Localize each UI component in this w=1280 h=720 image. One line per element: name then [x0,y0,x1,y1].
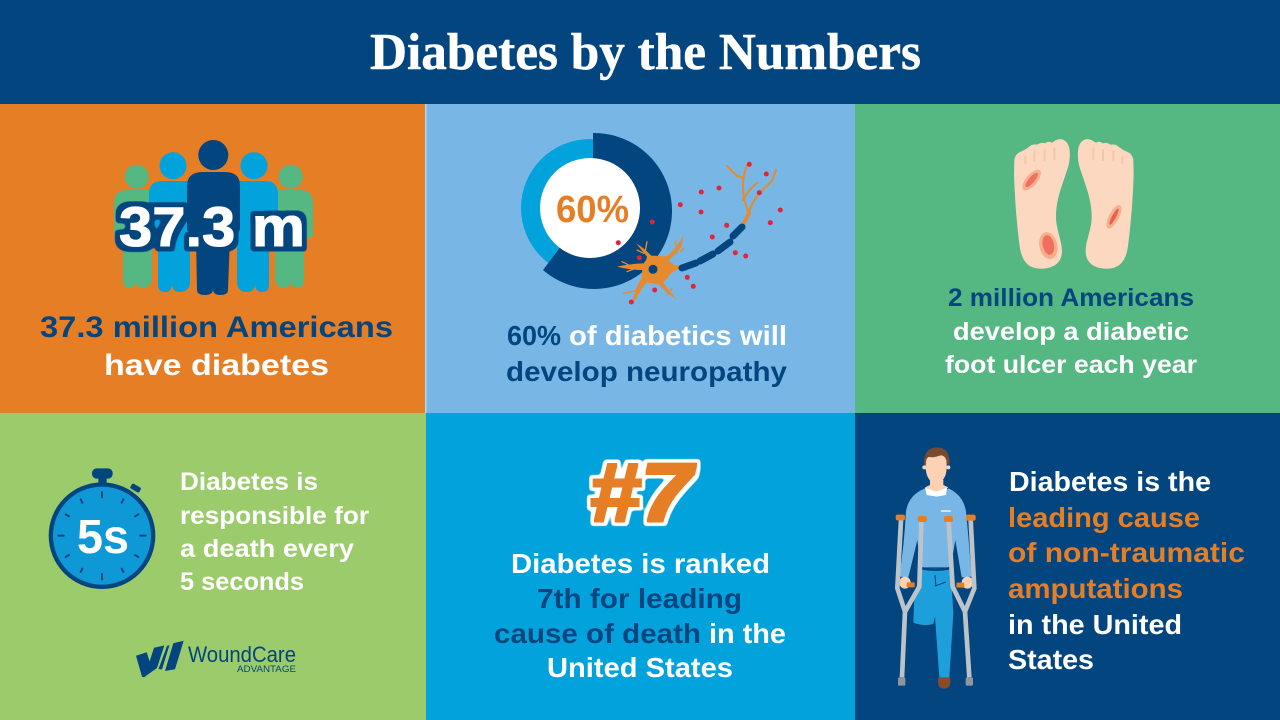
text block: United States [547,652,733,683]
text block: 2 million Americans [948,284,1194,312]
text block: cause of death [494,618,701,649]
icon: stopwatch: 5s [77,511,129,564]
text block: States [1008,644,1094,675]
donut chart: 60%: 60% [556,189,629,231]
panel: neuropathy [425,104,855,413]
text block: amputations [1008,573,1183,604]
text block: of non-traumatic [1008,537,1245,568]
panel: death every 5 seconds [0,413,426,720]
text block: 60% [507,320,561,351]
big number: 37.3 m [119,195,305,258]
text block: responsible for [180,502,369,530]
title: Diabetes by the Numbers [370,24,921,81]
donut chart: 60% [521,133,672,289]
logo: WoundCare Advantage: WoundCare [188,642,296,667]
text block [180,468,369,596]
text block: in the [709,618,786,649]
text block: foot ulcer each year [945,351,1197,379]
text block: 37.3 million Americans [40,311,393,344]
logo: WoundCare Advantage: ADVANTAGE [237,664,296,675]
red dots [616,162,783,304]
text block: have diabetes [104,349,329,382]
panel: foot ulcers [855,104,1280,413]
text block [945,284,1197,379]
text block [494,548,786,683]
header band [0,0,1280,104]
text block: develop neuropathy [506,356,787,387]
text block: leading cause [1008,502,1200,533]
icon: man on crutches [896,447,976,689]
panel: ranked 7th [426,413,855,720]
text block: 7th for leading [537,583,742,614]
text block: of diabetics will [569,320,787,351]
text block: Diabetes is ranked [511,548,770,579]
text block: develop a diabetic [953,318,1189,346]
text block: 5 seconds [180,568,304,596]
panel: amputations [855,413,1280,720]
icon: feet with ulcers [1014,139,1134,269]
text block: Diabetes is the [1009,466,1211,497]
text block [506,320,787,387]
icon: neuron [617,165,776,302]
text block: Diabetes is [180,468,318,496]
icon: group of people [114,140,313,295]
text block: in the United [1008,609,1182,640]
logo: WoundCare Advantage [136,641,296,677]
text block [40,311,393,382]
text block: a death every [180,535,354,563]
text block [1008,466,1245,675]
badge: #7: #7 [589,446,696,539]
icon: stopwatch [49,468,155,589]
panel: 37.3 million Americans [0,104,426,413]
